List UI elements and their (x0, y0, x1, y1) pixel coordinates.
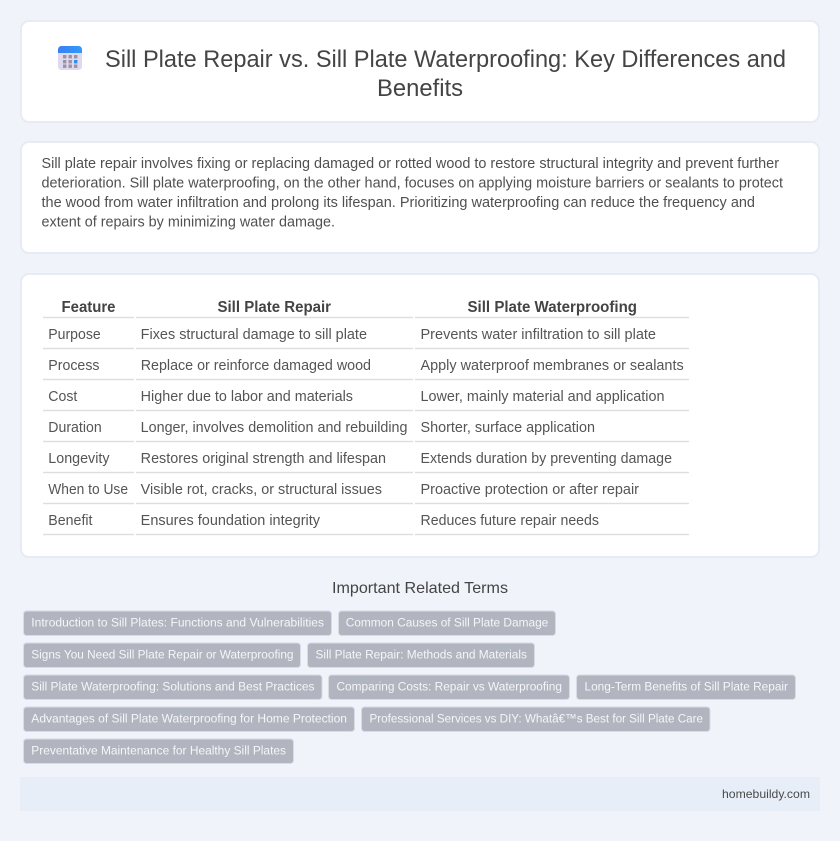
panel: related term tags (24, 611, 796, 764)
tag (24, 643, 300, 668)
tag: Preventative Maintenance for Healthy Sill Plates (31, 744, 286, 758)
tag (576, 675, 796, 700)
table row: benefit: Reduces future repair needs (420, 513, 599, 529)
table row: process: Replace or reinforce damaged wood (141, 358, 371, 374)
tag (24, 675, 322, 700)
table row: longevity: Restores original strength and lifespan (141, 451, 386, 467)
tag: Introduction to Sill Plates: Functions and Vulnerabilities (31, 616, 324, 630)
tag: Comparing Costs: Repair vs Waterproofing (336, 680, 562, 694)
table row: purpose: Prevents water infiltration to sill plate (420, 327, 656, 343)
table header row: Sill Plate Waterproofing (468, 299, 637, 316)
text block: introduction paragraph: extent of repairs by minimizing water damage. (42, 214, 335, 230)
tag: Signs You Need Sill Plate Repair or Waterproofing (31, 648, 294, 662)
table row: cost (43, 389, 689, 411)
table row: purpose: Purpose (48, 327, 101, 343)
table row: process: Apply waterproof membranes or sealants (420, 358, 684, 374)
table row: longevity: Longevity (48, 451, 110, 467)
tag (328, 675, 570, 700)
table row: duration: Duration (48, 420, 102, 436)
footer (20, 777, 820, 811)
tag (362, 707, 710, 732)
tag (24, 739, 294, 764)
text block: introduction paragraph: deterioration. Sill plate waterproofing, on the other hand, focuses on applying moisture barriers or sealants to protect (42, 176, 783, 192)
table header row (43, 299, 689, 318)
footer: homebuildy.com (722, 787, 810, 801)
table row: process: Process (48, 358, 100, 374)
icon: calendar (58, 46, 82, 70)
tag: Sill Plate Repair: Methods and Materials (316, 648, 527, 662)
tag (24, 707, 354, 732)
table row: when to use: Proactive protection or after repair (420, 482, 639, 498)
table row: duration (43, 420, 689, 442)
tag (308, 643, 534, 668)
table row: longevity (43, 451, 689, 473)
text block: introduction paragraph: the wood from water infiltration and prolong its lifespan. Prioritizing waterproofing can reduce the frequency and (42, 195, 755, 211)
tag: Sill Plate Waterproofing: Solutions and Best Practices (31, 680, 315, 694)
table row: when to use: Visible rot, cracks, or structural issues (141, 482, 382, 498)
text block: introduction paragraph: Sill plate repair involves fixing or replacing damaged or rotted wood to restore structural integrity and prevent further (42, 156, 779, 172)
table row: benefit: Benefit (48, 513, 93, 529)
table row: when to use: When to Use (48, 482, 128, 498)
panel: title header (21, 21, 819, 122)
panel: comparison table (21, 274, 819, 557)
tag (24, 611, 332, 636)
table row: cost: Cost (48, 389, 77, 405)
table row: purpose (43, 327, 689, 349)
table header row: Sill Plate Repair (218, 299, 331, 316)
table row: process (43, 358, 689, 380)
table row: purpose: Fixes structural damage to sill plate (141, 327, 367, 343)
panel: introduction (21, 142, 819, 253)
table row: longevity: Extends duration by preventing damage (420, 451, 672, 467)
table row: duration: Longer, involves demolition and rebuilding (141, 420, 408, 436)
tag: Professional Services vs DIY: Whatâ€™s Best for Sill Plate Care (370, 712, 703, 726)
table row: cost: Higher due to labor and materials (141, 389, 353, 405)
heading: related terms: Important Related Terms (332, 580, 508, 597)
table row: duration: Shorter, surface application (420, 420, 595, 436)
tag: Long-Term Benefits of Sill Plate Repair (584, 680, 788, 694)
tag (338, 611, 556, 636)
table row: benefit (43, 513, 689, 535)
tag: Advantages of Sill Plate Waterproofing for Home Protection (31, 712, 347, 726)
tag: Common Causes of Sill Plate Damage (346, 616, 549, 630)
table row: benefit: Ensures foundation integrity (141, 513, 321, 529)
table header row: Feature (62, 299, 116, 316)
table row: cost: Lower, mainly material and application (420, 389, 665, 405)
title: Benefits (377, 75, 463, 102)
title: Sill Plate Repair vs. Sill Plate Waterproofing: Key Differences and (105, 46, 786, 73)
table row: when to use (43, 482, 689, 504)
